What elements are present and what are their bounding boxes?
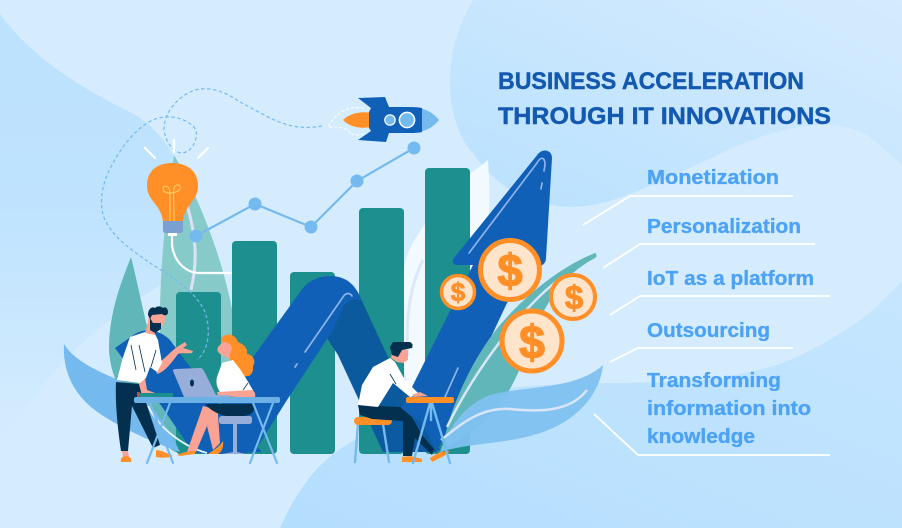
list item: Transforming information into knowledge: knowledge <box>647 426 755 448</box>
bulb filament <box>163 185 180 222</box>
man ankle <box>122 451 129 457</box>
woman hair <box>221 335 254 377</box>
coin 2: $ <box>451 277 466 307</box>
list item: Personalization: Personalization <box>647 216 801 238</box>
icon: rocket <box>328 97 439 142</box>
arrow dark segment <box>325 299 440 452</box>
desk top <box>134 397 280 403</box>
woman torso <box>216 360 254 392</box>
leaf: light blue right <box>440 365 603 452</box>
list item: Monetization: Monetization <box>647 167 779 189</box>
coin 2 <box>442 276 474 308</box>
bar 2 <box>232 241 277 454</box>
dashed flight path <box>101 89 322 360</box>
desk legs <box>147 403 277 463</box>
icon: light bulb <box>145 140 208 236</box>
bar 4 <box>359 208 404 454</box>
stool: seated man <box>354 417 392 462</box>
line chart <box>190 142 420 242</box>
list item: Outsourcing <box>610 320 793 362</box>
title <box>498 68 831 130</box>
bulb glass <box>147 163 198 222</box>
coin 4: $ <box>519 316 545 368</box>
seated man head <box>391 348 408 363</box>
rocket nose <box>420 108 439 132</box>
bulb wire <box>172 233 232 273</box>
leaf: teal left <box>109 257 205 452</box>
list item: Transforming information into knowledge <box>594 370 830 455</box>
bulb rays <box>145 140 208 158</box>
rocket flame trail <box>328 107 366 135</box>
woman skirt <box>205 404 254 417</box>
man shoes <box>121 450 173 462</box>
bulb base <box>163 221 183 233</box>
seated man hand <box>412 392 428 397</box>
woman face <box>217 342 232 359</box>
title: BUSINESS ACCELERATION <box>498 68 804 95</box>
seated man pants <box>358 405 434 456</box>
rocket windows <box>385 115 395 125</box>
coin 1: $ <box>497 245 523 296</box>
background blob: bottom right <box>280 280 902 528</box>
coin 1 <box>480 240 540 300</box>
bar 3 <box>290 272 335 454</box>
white vein under left arm <box>148 406 207 453</box>
seated man shoes <box>402 451 450 462</box>
growth arrow <box>115 151 552 454</box>
background blob: top right <box>450 0 902 207</box>
leaf: white behind arrow <box>401 160 489 400</box>
bar 5 <box>425 168 470 454</box>
woman arm <box>217 390 255 398</box>
laptop <box>173 368 230 398</box>
coin 3: $ <box>565 279 583 316</box>
rocket flame <box>343 112 371 128</box>
leaf: teal right <box>443 253 596 450</box>
man legs <box>116 382 160 451</box>
title: THROUGH IT INNOVATIONS <box>498 103 831 130</box>
bar chart <box>176 168 470 454</box>
man head <box>145 312 166 335</box>
arrow head and shaft <box>383 151 552 452</box>
bar 1 <box>176 292 221 454</box>
leaf: light teal behind bulb <box>160 155 236 452</box>
person: standing man <box>116 306 193 462</box>
leaf: light blue left <box>64 344 180 452</box>
arrow highlights <box>295 158 545 397</box>
list item: IoT as a platform: IoT as a platform <box>647 268 814 290</box>
rocket body <box>358 97 422 142</box>
desk <box>134 397 280 463</box>
arrow rising arm <box>215 276 362 454</box>
woman legs <box>187 406 220 452</box>
book <box>137 392 173 397</box>
desk: seated man <box>406 397 454 463</box>
background blob: left <box>0 14 177 445</box>
arrow lower dark shading <box>380 410 437 452</box>
arrow left arm <box>115 330 262 454</box>
man hair <box>148 306 168 319</box>
coin 3 <box>551 275 595 319</box>
seated man torso <box>358 358 420 407</box>
man torso <box>117 330 162 383</box>
seated man hair <box>390 342 413 357</box>
list item: Transforming information into knowledge: information into <box>647 398 811 420</box>
coin 4 <box>502 311 562 371</box>
person: seated woman <box>177 335 255 456</box>
woman stool <box>219 416 252 454</box>
man beard <box>150 318 161 333</box>
list item: Monetization <box>583 167 793 225</box>
woman shoes <box>177 441 223 456</box>
person: seated man <box>358 342 450 462</box>
man arm <box>155 342 193 374</box>
list item: IoT as a platform <box>610 268 830 315</box>
list item: Outsourcing: Outsourcing <box>647 320 770 342</box>
list item: Personalization <box>603 216 815 268</box>
list item: Transforming information into knowledge: Transforming <box>647 370 781 392</box>
